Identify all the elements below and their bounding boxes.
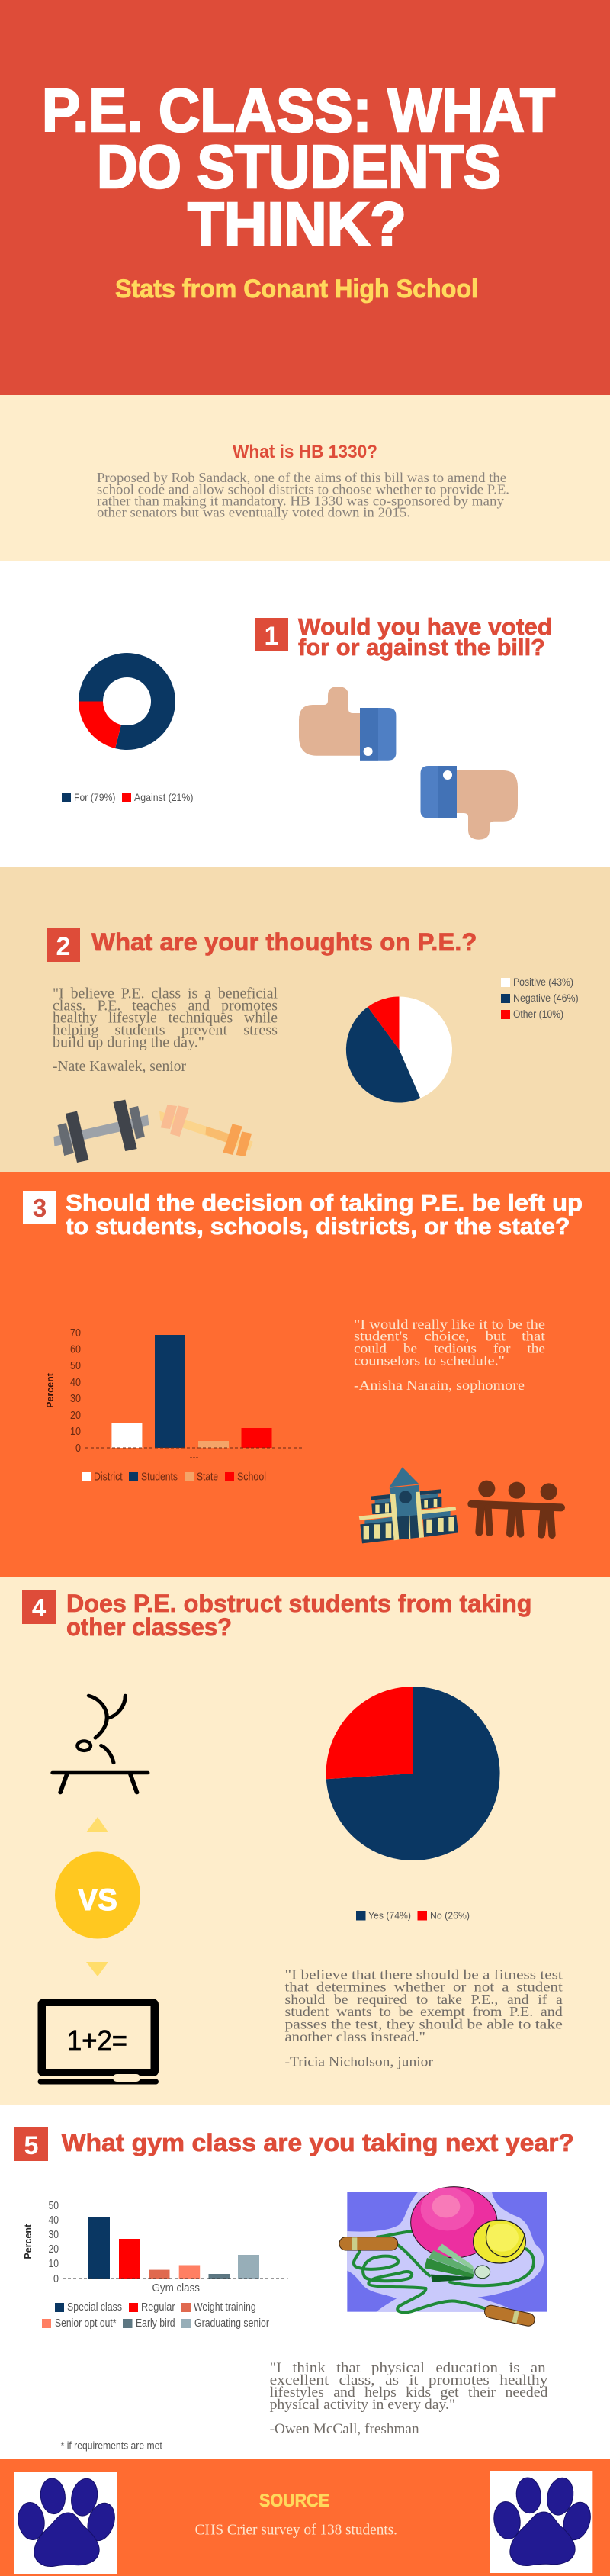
legend: thoughts on P.E.: Positive (43%) <box>513 976 573 988</box>
text block: bill description: school code and allow school districts to choose whether to provide P.E. <box>97 482 509 497</box>
panel: source footer <box>0 2459 610 2576</box>
legend: Early bird <box>136 2317 175 2330</box>
legend: School <box>237 1471 266 1483</box>
badge: number 5 <box>14 2127 48 2161</box>
quote: Tricia Nicholson: that determines whether or not a student <box>285 1979 563 1995</box>
panel: question 3 <box>0 1172 610 1577</box>
y axis ticks: 30 <box>70 1393 81 1405</box>
y axis ticks: 30 <box>49 2229 59 2241</box>
heading: question 4 <box>66 1590 532 1641</box>
badge: number 4: 4 <box>32 1594 47 1622</box>
icon: sports equipment clip art <box>339 2187 547 2327</box>
panel: question 1 <box>0 561 610 867</box>
footnote: * if requirements are met <box>61 2439 162 2452</box>
panel: question 2 <box>0 867 610 1172</box>
heading: question 1 <box>298 613 552 661</box>
heading: question 4: other classes? <box>66 1613 232 1641</box>
y axis ticks: 10 <box>70 1426 81 1438</box>
quote: Anisha Narain: counselors to schedule." <box>354 1352 505 1368</box>
y axis ticks <box>70 1327 81 1455</box>
y axis ticks: 40 <box>49 2214 59 2227</box>
quote: Tricia Nicholson: "I believe that there should be a fitness test <box>285 1967 563 1982</box>
heading: source: SOURCE <box>259 2491 329 2511</box>
legend: State <box>197 1471 218 1483</box>
legend: for vs against: For (79%) <box>74 791 116 803</box>
legend: for vs against <box>62 791 194 803</box>
icon: VS circle: VS <box>78 1883 117 1917</box>
y axis ticks: 40 <box>70 1377 81 1389</box>
title: THINK? <box>188 190 406 258</box>
badge: number 3: 3 <box>33 1194 47 1222</box>
y axis ticks: 20 <box>49 2243 59 2256</box>
bars <box>111 1335 271 1448</box>
badge: number 2 <box>47 928 80 962</box>
y axis ticks: 0 <box>53 2273 59 2285</box>
heading: question 3: Should the decision of taking P.E. be left up <box>66 1189 583 1216</box>
legend: Students <box>141 1471 178 1483</box>
text block: bill description <box>97 470 509 520</box>
quote: Nate Kawalek: helping students prevent stress <box>53 1021 278 1038</box>
panel: question 4 <box>0 1577 610 2105</box>
panel: what is HB 1330 <box>0 395 610 561</box>
badge: number 1: 1 <box>265 622 278 651</box>
y axis ticks: 70 <box>70 1327 81 1339</box>
icon: orange dumbbell <box>159 1105 253 1156</box>
legend: thoughts on P.E.: Other (10%) <box>513 1008 563 1020</box>
quote: Anisha Narain: student's choice, but that <box>354 1329 545 1344</box>
panel: question 5 <box>0 2105 610 2459</box>
quote: Tricia Nicholson: -Tricia Nicholson, junior <box>285 2053 433 2069</box>
text block: bill description: other senators but was eventually voted down in 2015. <box>97 505 410 520</box>
legend: Special class <box>67 2301 122 2314</box>
panel: title header <box>0 0 610 395</box>
pie chart: obstruct other classes <box>326 1687 500 1860</box>
quote: Anisha Narain: -Anisha Narain, sophomore <box>354 1378 525 1393</box>
icon: thumbs down <box>421 766 518 840</box>
legend: yes vs no <box>356 1910 470 1921</box>
icon: thumbs up <box>299 687 396 761</box>
y axis ticks: 20 <box>70 1410 81 1422</box>
quote: Nate Kawalek <box>53 985 278 1075</box>
legend: Regular <box>141 2301 175 2314</box>
icon: school building <box>359 1467 458 1543</box>
arrow: down triangle <box>86 1962 108 1976</box>
quote: Owen McCall <box>270 2361 548 2437</box>
heading: what is HB 1330: What is HB 1330? <box>233 442 377 462</box>
y axis ticks: 60 <box>70 1344 81 1356</box>
y axis ticks <box>49 2200 59 2285</box>
legend: thoughts on P.E.: Negative (46%) <box>513 992 579 1004</box>
legend <box>82 1471 266 1483</box>
quote: Anisha Narain <box>354 1317 545 1393</box>
quote: Tricia Nicholson: another class instead." <box>285 2029 425 2044</box>
title: P.E. CLASS: WHAT <box>42 76 555 144</box>
heading: question 3 <box>66 1189 583 1240</box>
legend: thoughts on P.E. <box>501 976 579 1020</box>
y axis ticks: 50 <box>49 2200 59 2212</box>
icon: VS circle <box>55 1852 140 1939</box>
heading: question 2: What are your thoughts on P.E.? <box>92 928 477 956</box>
y axis ticks: 0 <box>75 1442 81 1455</box>
heading: question 5: What gym class are you taking next year? <box>62 2129 574 2156</box>
quote: Tricia Nicholson: student wants to be exempt from P.E. and <box>285 2004 563 2019</box>
quote: Owen McCall: physical activity in every day." <box>270 2398 455 2413</box>
quote: Tricia Nicholson: should be required to take P.E., and if a <box>285 1992 563 2007</box>
text block: bill description: Proposed by Rob Sandack, one of the aims of this bill was to amend the <box>97 470 506 485</box>
quote: Owen McCall: excellent class, as it promotes healthy <box>270 2373 548 2388</box>
bar chart: who should decide <box>45 1327 303 1483</box>
bars <box>88 2217 259 2279</box>
heading: question 4: Does P.E. obstruct students from taking <box>66 1590 532 1617</box>
badge: number 5: 5 <box>24 2131 38 2160</box>
text block: bill description: rather than making it mandatory. HB 1330 was co-sponsored by many <box>97 494 504 509</box>
badge: number 4 <box>22 1590 56 1624</box>
donut chart: for vs against <box>79 653 175 750</box>
quote: Owen McCall: -Owen McCall, freshman <box>270 2422 419 2437</box>
quote: Nate Kawalek: build up during the day." <box>53 1034 204 1050</box>
subtitle: Stats from Conant High School <box>115 275 478 304</box>
icon: grey dumbbell <box>53 1100 149 1163</box>
badge: number 2: 2 <box>56 932 70 961</box>
title: DO STUDENTS <box>97 133 501 201</box>
heading: question 1: for or against the bill? <box>298 634 545 661</box>
title <box>42 76 555 258</box>
quote: Nate Kawalek: "I believe P.E. class is a beneficial <box>53 985 278 1002</box>
icon: laptop with math: 1+2= <box>67 2025 127 2057</box>
badge: number 1 <box>255 618 288 651</box>
quote: Anisha Narain: could be tedious for the <box>354 1341 545 1356</box>
y axis ticks: 10 <box>49 2258 59 2270</box>
badge: number 3 <box>23 1191 56 1224</box>
legend: yes vs no: No (26%) <box>430 1910 470 1921</box>
quote: Nate Kawalek: -Nate Kawalek, senior <box>53 1058 186 1075</box>
y axis ticks: 50 <box>70 1360 81 1372</box>
heading: question 3: to students, schools, districts, or the state? <box>66 1213 570 1240</box>
icon: three students <box>471 1481 561 1535</box>
bar chart: gym class next year <box>23 2200 288 2330</box>
quote: Owen McCall: lifestyles and helps kids get their needed <box>270 2385 548 2401</box>
heading: question 1: Would you have voted <box>298 613 552 640</box>
icon: right paw print <box>490 2471 595 2573</box>
arrow: up triangle <box>86 1817 108 1832</box>
legend <box>42 2301 269 2330</box>
icon: laptop with math <box>38 1999 159 2084</box>
quote: Owen McCall: "I think that physical education is an <box>270 2361 546 2376</box>
icon: left paw print <box>14 2472 119 2574</box>
quote: Tricia Nicholson <box>285 1967 563 2069</box>
legend: for vs against: Against (21%) <box>134 791 194 803</box>
quote: Nate Kawalek: class. P.E. teaches and promotes <box>53 997 278 1014</box>
text block: source note: CHS Crier survey of 138 students. <box>195 2522 397 2539</box>
y axis title: Percent <box>45 1372 56 1408</box>
legend: Senior opt out* <box>55 2317 117 2330</box>
icon: gymnast on beam <box>53 1696 148 1793</box>
legend: Graduating senior <box>194 2317 269 2330</box>
quote: Anisha Narain: "I would really like it to be the <box>354 1317 545 1332</box>
legend: yes vs no: Yes (74%) <box>368 1910 411 1921</box>
x axis title: Gym class <box>152 2282 200 2295</box>
legend: Weight training <box>194 2301 256 2314</box>
y axis title: Percent <box>23 2224 34 2259</box>
pie chart: thoughts on P.E. <box>346 996 452 1103</box>
legend: District <box>94 1471 123 1483</box>
quote: Nate Kawalek: healthy lifestyle techniques while <box>53 1009 278 1026</box>
quote: Tricia Nicholson: passes the test, they should be able to take <box>285 2017 563 2032</box>
